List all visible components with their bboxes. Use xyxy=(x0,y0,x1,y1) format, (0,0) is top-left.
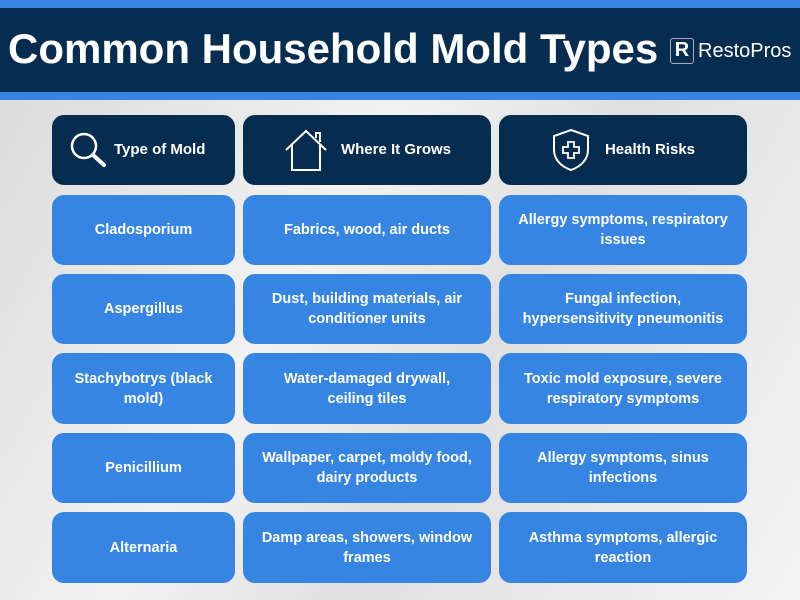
icon: shield xyxy=(553,129,589,171)
row 1: Cladosporium xyxy=(95,222,192,238)
header: where it grows: Where It Grows xyxy=(341,141,451,158)
title: Common Household Mold Types xyxy=(8,25,658,72)
row 4 xyxy=(52,433,235,503)
logo: RestoPros xyxy=(698,40,791,62)
text: Wallpaper, carpet, moldy food, dairy products xyxy=(262,450,472,486)
logo xyxy=(670,38,791,64)
header band xyxy=(0,0,800,100)
text: Toxic mold exposure, severe respiratory symptoms xyxy=(524,370,722,406)
row 5 xyxy=(52,512,235,583)
text: hypersensitivity pneumonitis xyxy=(523,311,723,327)
header: type of mold: Type of Mold xyxy=(114,141,205,158)
text: Damp areas, showers, window frames xyxy=(262,530,472,566)
header: health risks: Health Risks xyxy=(605,141,695,158)
header: type of mold xyxy=(52,115,235,185)
text: Allergy symptoms, respiratory issues xyxy=(518,212,728,248)
text: Allergy symptoms, sinus infections xyxy=(537,450,709,486)
row 5: Alternaria xyxy=(110,540,177,556)
header: health risks xyxy=(499,115,747,185)
row 2 xyxy=(52,274,235,344)
text: Water-damaged drywall, xyxy=(284,370,450,386)
text: Asthma symptoms, allergic reaction xyxy=(529,530,717,566)
icon: magnifier xyxy=(70,132,106,168)
header: where it grows xyxy=(243,115,491,185)
row 3: Stachybotrys (black mold) xyxy=(75,370,212,406)
text: ceiling tiles xyxy=(328,390,406,406)
row 1 xyxy=(52,195,235,265)
text: Dust, building materials, air conditioner units xyxy=(272,291,462,327)
text: Fabrics, wood, air ducts xyxy=(284,222,450,238)
row 4: Penicillium xyxy=(105,460,182,476)
text: Fungal infection, xyxy=(565,291,681,307)
row 2: Aspergillus xyxy=(104,301,183,317)
logo: R xyxy=(675,39,689,61)
icon: house xyxy=(285,130,327,171)
row 3 xyxy=(52,353,235,424)
